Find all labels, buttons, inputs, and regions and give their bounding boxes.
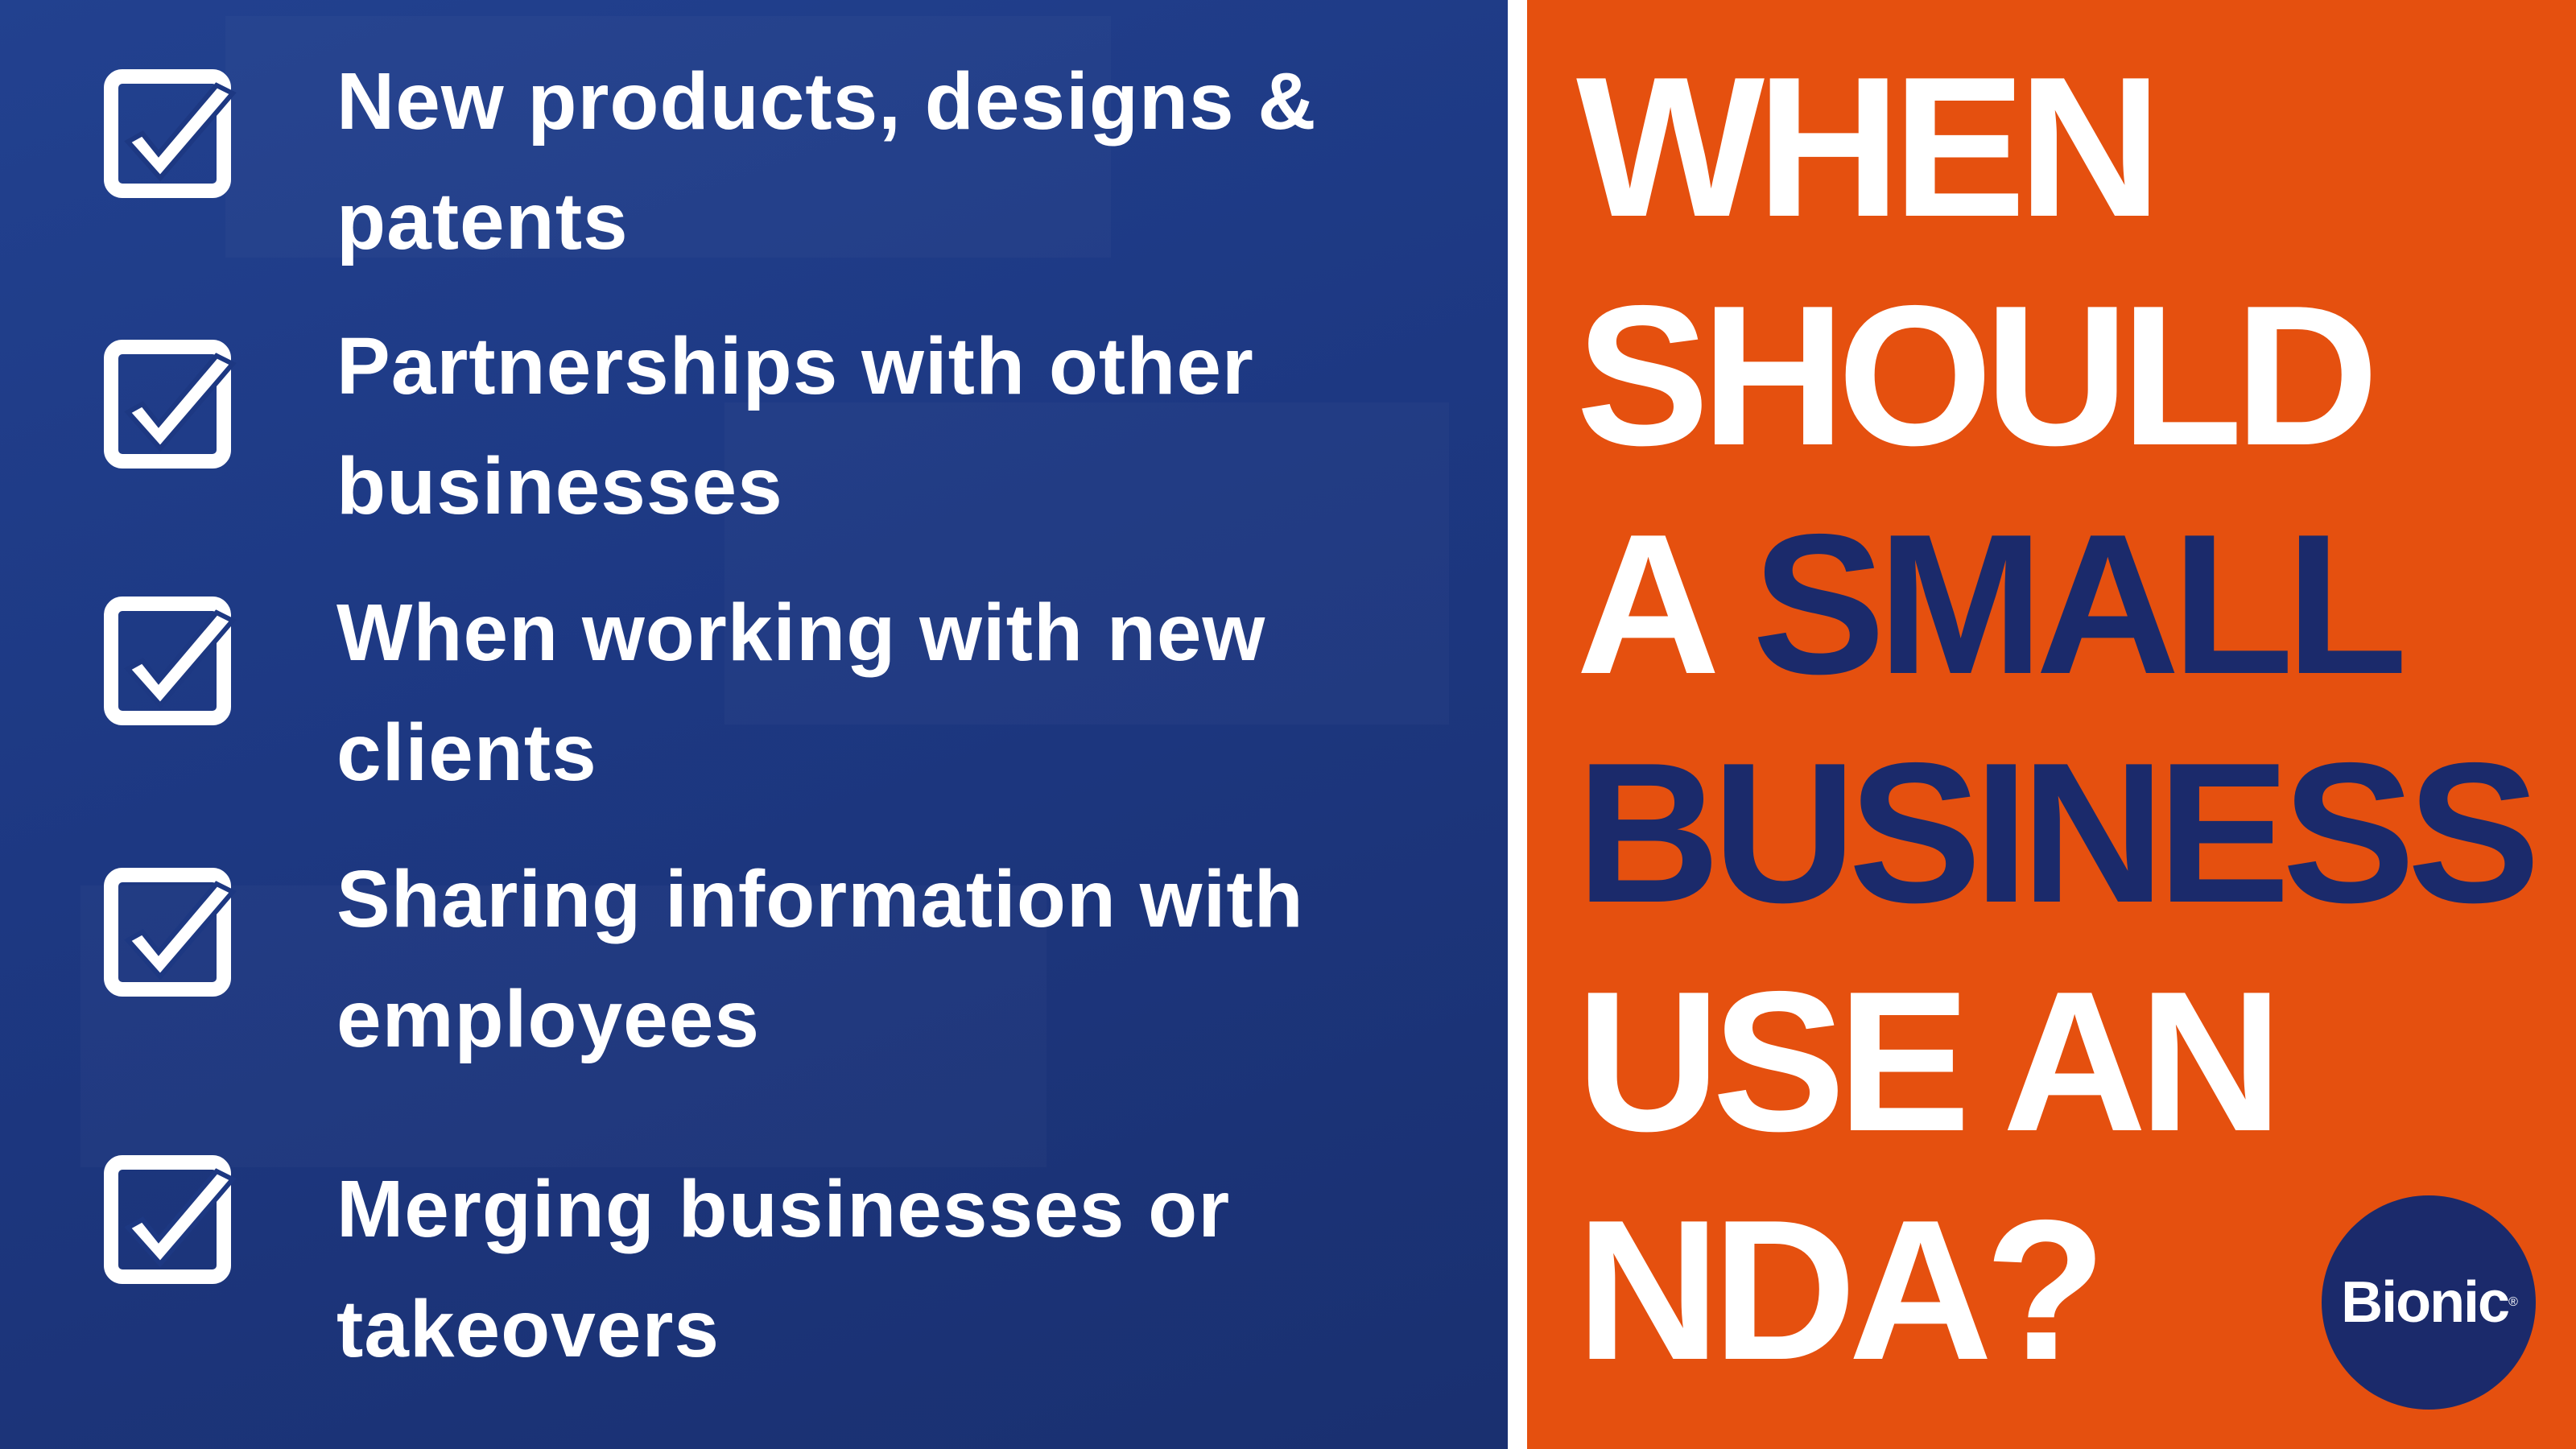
text: item 2: businesses xyxy=(336,441,783,531)
icon: checkbox xyxy=(104,69,237,198)
title: BUSINESS xyxy=(1576,720,2533,944)
item 1 xyxy=(104,56,1317,266)
text: item 4: Sharing information with xyxy=(336,854,1304,944)
text: item 1: New products, designs & xyxy=(336,56,1317,147)
text: item 1: patents xyxy=(336,176,629,266)
text: item 5: takeovers xyxy=(336,1284,720,1374)
logo: Bionic xyxy=(2322,1195,2536,1410)
title: USE AN xyxy=(1576,949,2275,1173)
logo: Bionic: Bionic xyxy=(2341,1270,2508,1335)
icon: checkbox xyxy=(104,340,231,469)
icon: checkbox xyxy=(104,597,231,725)
text: item 2: Partnerships with other xyxy=(336,321,1254,411)
text: item 3: clients xyxy=(336,708,597,798)
title xyxy=(1576,35,2533,1402)
title: SHOULD xyxy=(1576,263,2371,487)
text: item 4 xyxy=(336,854,1304,1064)
item 2 xyxy=(104,321,1254,531)
text: item 5: Merging businesses or xyxy=(336,1164,1230,1254)
title: WHEN xyxy=(1576,35,2154,258)
text: item 1 xyxy=(336,56,1317,266)
panel: left list background xyxy=(0,0,1508,1449)
icon: checkbox xyxy=(104,868,231,997)
item 3 xyxy=(104,588,1265,798)
icon: checkbox xyxy=(104,1155,231,1284)
title: A SMALL xyxy=(1576,492,2400,716)
text: item 5 xyxy=(336,1164,1230,1374)
item 5 xyxy=(104,1155,1230,1374)
text: item 4: employees xyxy=(336,974,760,1064)
text: item 2 xyxy=(336,321,1254,531)
item 4 xyxy=(104,854,1304,1064)
text: item 3: When working with new xyxy=(336,588,1265,678)
logo: Bionic: ® xyxy=(2508,1295,2516,1309)
text: item 3 xyxy=(336,588,1265,798)
title: NDA? xyxy=(1576,1178,2099,1402)
